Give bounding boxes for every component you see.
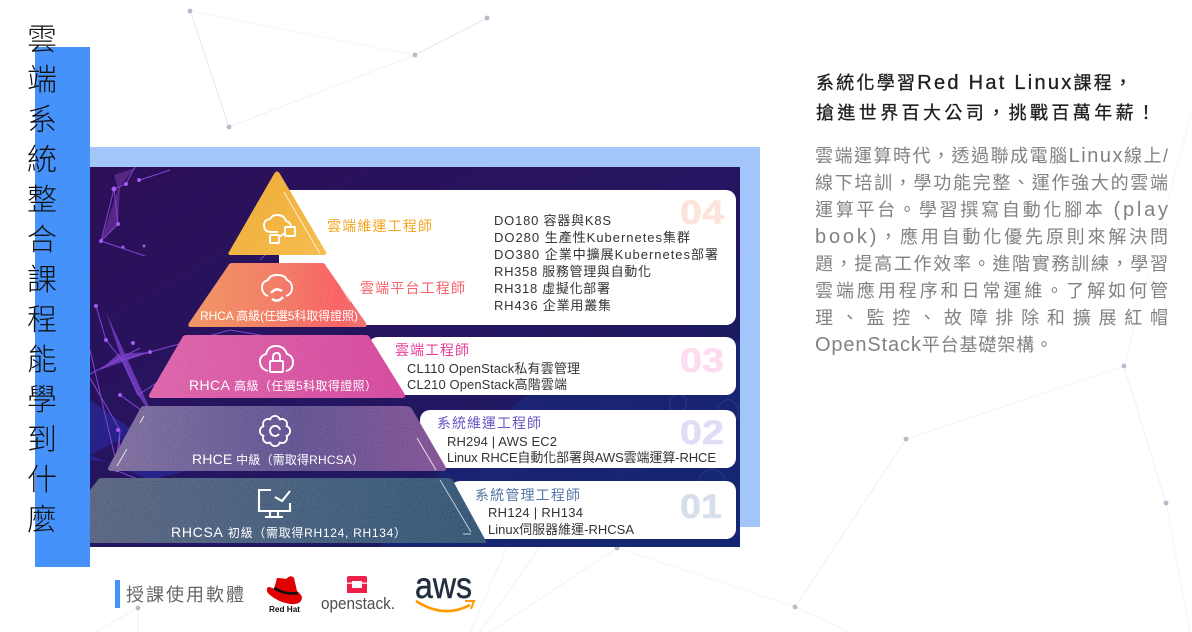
course list 04: RH358 服務管理與自動化	[494, 264, 651, 279]
right body text: 雲端運算時代，透過聯成電腦Linux線上/	[815, 145, 1168, 167]
section heading: 授課使用軟體	[126, 585, 244, 605]
icon: gear	[260, 416, 290, 446]
right heading: 搶進世界百大公司，挑戰百萬年薪！	[816, 103, 1155, 123]
pyramid tier: cloud platform	[188, 263, 367, 327]
right heading: 系統化學習Red Hat Linux課程，	[816, 72, 1132, 94]
logo: Red Hat	[267, 576, 302, 614]
number 03: 03	[680, 342, 724, 380]
pyramid tier: RHCSA	[90, 478, 487, 543]
course list 01: RH124 | RH134	[488, 505, 583, 520]
logo: Red Hat: Red Hat	[269, 605, 300, 614]
panel 01 white card	[450, 481, 736, 539]
role label: system ops engineer: 系統維運工程師	[437, 415, 541, 431]
vertical title: 雲	[27, 24, 57, 57]
vertical title: 整	[27, 184, 57, 217]
right body text: 線下培訓，學功能完整、運作強大的雲端	[815, 173, 1168, 193]
course list 03	[407, 361, 580, 392]
label: RHCA tier 2: RHCA 高級(任選5科取得證照)	[200, 308, 358, 323]
course list 04: DO280 生產性Kubernetes集群	[494, 230, 690, 245]
course list 02: RH294 | AWS EC2	[447, 434, 557, 449]
pyramid tier: cloud ops	[228, 172, 326, 255]
vertical title: 能	[27, 344, 57, 377]
icon: cloud lock	[260, 346, 293, 372]
course list 04: RH318 虛擬化部署	[494, 281, 610, 296]
vertical title: 到	[27, 424, 57, 457]
vertical title: 麼	[27, 504, 57, 537]
right body text: 理、監控、故障排除和擴展紅帽	[815, 308, 1168, 328]
role label: cloud ops engineer: 雲端維運工程師	[327, 218, 432, 234]
course list 04: RH436 企業用叢集	[494, 298, 611, 313]
course list 01: Linux伺服器維運-RHCSA	[488, 522, 634, 537]
vertical title: 系	[27, 104, 57, 137]
right body text: 題，提高工作效率。進階實務訓練，學習	[815, 254, 1168, 274]
course list 01	[488, 505, 634, 537]
course list 04: DO180 容器與K8S	[494, 213, 611, 228]
section accent bar	[115, 580, 120, 608]
vertical title: 端	[27, 64, 57, 97]
pyramid tier: RHCE	[108, 406, 446, 471]
vertical title: 合	[27, 224, 57, 257]
role label: cloud engineer: 雲端工程師	[395, 342, 469, 358]
blue title bar	[35, 47, 90, 567]
panel 02 white card	[420, 410, 736, 468]
icon: cloud with nodes	[264, 215, 295, 243]
vertical title: 統	[27, 144, 57, 177]
pyramid tier: RHCA	[149, 335, 405, 398]
panel 03 white card	[368, 337, 736, 395]
right body text: book)，應用自動化優先原則來解決問	[815, 226, 1168, 248]
course list 04	[494, 213, 718, 313]
vertical title: 課	[27, 264, 57, 297]
logo: AWS: aws	[415, 565, 472, 606]
vertical title: 什	[27, 464, 57, 497]
number 02: 02	[680, 414, 724, 452]
vertical title: 學	[27, 384, 57, 417]
icon: monitor check	[259, 490, 290, 517]
light blue backing panel	[90, 147, 760, 527]
right heading	[816, 72, 1155, 123]
vertical title: 程	[27, 304, 57, 337]
role label: cloud platform engineer: 雲端平台工程師	[360, 280, 465, 296]
right body text: 雲端應用程序和日常運維。了解如何管	[815, 280, 1168, 301]
pyramid infographic panel	[90, 167, 740, 547]
course list 02	[447, 434, 716, 465]
software section	[115, 565, 474, 614]
number 04: 04	[680, 194, 724, 232]
right body text: 運算平台。學習撰寫自動化腳本 (play	[815, 199, 1168, 221]
logo: OpenStack: openstack.	[321, 594, 395, 613]
dark network background	[90, 167, 740, 547]
label: RHCE: RHCE 中級（需取得RHCSA）	[192, 451, 364, 467]
logo: OpenStack	[321, 576, 395, 613]
icon: cloud sync	[262, 275, 292, 301]
role label: system admin engineer: 系統管理工程師	[475, 487, 580, 503]
course list 04: DO380 企業中擴展Kubernetes部署	[494, 247, 718, 262]
right body text: OpenStack平台基礎架構。	[815, 334, 1053, 356]
course list 03: CL210 OpenStack高階雲端	[407, 377, 567, 392]
course list 03: CL110 OpenStack私有雲管理	[407, 361, 580, 376]
label: RHCA: RHCA 高級（任選5科取得證照）	[189, 377, 377, 393]
purple network artwork	[90, 167, 740, 547]
right body text	[815, 145, 1168, 356]
panel 04 white card	[279, 190, 736, 325]
label: RHCSA: RHCSA 初級（需取得RH124, RH134）	[171, 524, 406, 540]
course list 02: Linux RHCE自動化部署與AWS雲端運算-RHCE	[447, 450, 716, 465]
number 01: 01	[680, 488, 722, 526]
